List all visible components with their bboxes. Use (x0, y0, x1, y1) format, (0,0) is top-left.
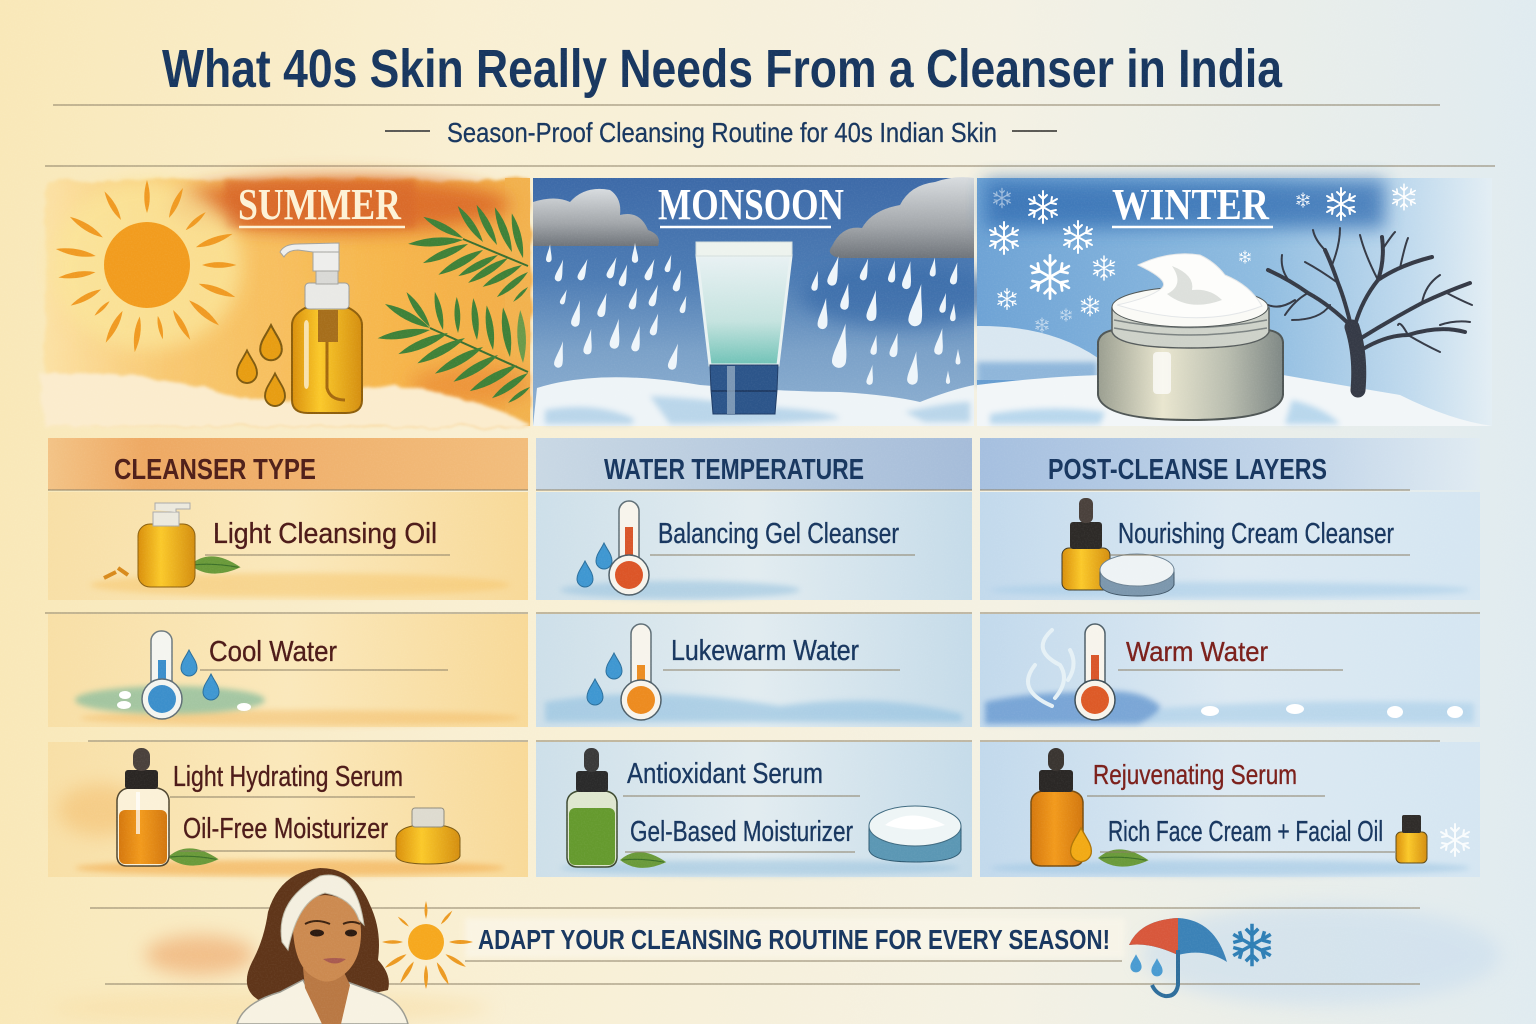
row: lukewarm water: Lukewarm Water (671, 635, 859, 667)
heading: winter: WINTER (1112, 180, 1270, 229)
row: antioxidant serum and gel moisturizer (536, 742, 972, 877)
row: balancing gel cleanser (536, 492, 972, 600)
snowy ground (533, 377, 974, 426)
panel: winter scene (977, 178, 1492, 426)
oil drops (237, 325, 285, 406)
header: water temperature (536, 438, 972, 490)
icon: warm thermometer (1075, 624, 1115, 720)
row: serum and moisturizer: Light Hydrating Serum (173, 761, 403, 793)
row: warm water: Warm Water (1126, 636, 1268, 667)
rain drops (546, 243, 961, 385)
row: antioxidant serum and gel moisturizer: Gel-Based Moisturizer (630, 816, 853, 848)
header: post-cleanse layers (980, 438, 1480, 490)
panel: monsoon scene (533, 177, 1000, 426)
woman in bathrobe and headband (237, 868, 408, 1024)
bare tree (1268, 228, 1472, 390)
snow hills (977, 326, 1492, 426)
panel: summer scene (40, 177, 531, 427)
icon: blue thermometer (142, 631, 182, 719)
snowflakes (990, 184, 1415, 332)
icon: small oil bottle (1396, 815, 1427, 863)
column: monsoon details (536, 438, 972, 877)
row: rejuvenating serum and rich cream (980, 742, 1480, 877)
header: post-cleanse layers: POST-CLEANSE LAYERS (1048, 454, 1327, 486)
icon: small snowflake (1441, 824, 1469, 856)
row: antioxidant serum and gel moisturizer: Antioxidant Serum (627, 758, 823, 790)
row: warm water (980, 614, 1480, 727)
icon: dropper serum bottle (117, 748, 219, 866)
header: cleanser type (48, 438, 528, 490)
icon: warm thermometer and drops (587, 624, 661, 720)
heading: summer: SUMMER (238, 180, 402, 229)
call to action: ADAPT YOUR CLEANSING ROUTINE FOR EVERY SEASON! (478, 924, 1110, 955)
row: light cleansing oil (48, 492, 528, 600)
icon: dropper bottle and cream jar (1062, 498, 1174, 596)
row: lukewarm water (536, 614, 972, 727)
title: What 40s Skin Really Needs From a Cleanser in India (162, 39, 1283, 99)
row: serum and moisturizer: Oil-Free Moisturizer (183, 813, 388, 845)
footer banner (50, 868, 1500, 1024)
header: cleanser type: CLEANSER TYPE (114, 454, 316, 486)
icon: amber serum bottle (1031, 748, 1149, 867)
icon: gel moisturizer jar (869, 806, 961, 862)
row: nourishing cream cleanser (980, 492, 1480, 600)
header: water temperature: WATER TEMPERATURE (604, 454, 864, 486)
icon: steam (1028, 630, 1074, 706)
icon: oil bottle and leaf (104, 503, 241, 587)
row: rejuvenating serum and rich cream: Rejuvenating Serum (1093, 759, 1297, 790)
row: nourishing cream cleanser: Nourishing Cream Cleanser (1118, 518, 1394, 550)
column: winter details (980, 438, 1480, 877)
icon: sun (382, 901, 473, 989)
icon: blue snowflake (1233, 924, 1271, 966)
row: rejuvenating serum and rich cream: Rich Face Cream + Facial Oil (1108, 816, 1383, 848)
clouds (533, 177, 974, 258)
row: cool water: Cool Water (209, 636, 337, 668)
icon: cream jar (1098, 254, 1283, 420)
sand dunes (40, 373, 530, 427)
row: serum and moisturizer (48, 742, 528, 877)
palm leaves (377, 203, 531, 405)
column: summer details (45, 438, 528, 877)
icon: gel cleanser tube (696, 242, 792, 414)
row: balancing gel cleanser: Balancing Gel Cleanser (658, 518, 899, 550)
icon: cleansing oil pump bottle (280, 243, 362, 413)
icon: green serum bottle (567, 748, 666, 868)
subtitle: Season-Proof Cleansing Routine for 40s Indian Skin (447, 117, 997, 148)
icon: moisturizer jar (396, 808, 460, 864)
heading: monsoon: MONSOON (658, 180, 844, 229)
row: light cleansing oil: Light Cleansing Oil (213, 518, 437, 550)
icon: hot thermometer and drops (577, 501, 649, 595)
icon: sun (55, 180, 237, 353)
icon: umbrella (1129, 918, 1227, 996)
row: cool water (48, 614, 528, 727)
water drops (181, 650, 219, 700)
